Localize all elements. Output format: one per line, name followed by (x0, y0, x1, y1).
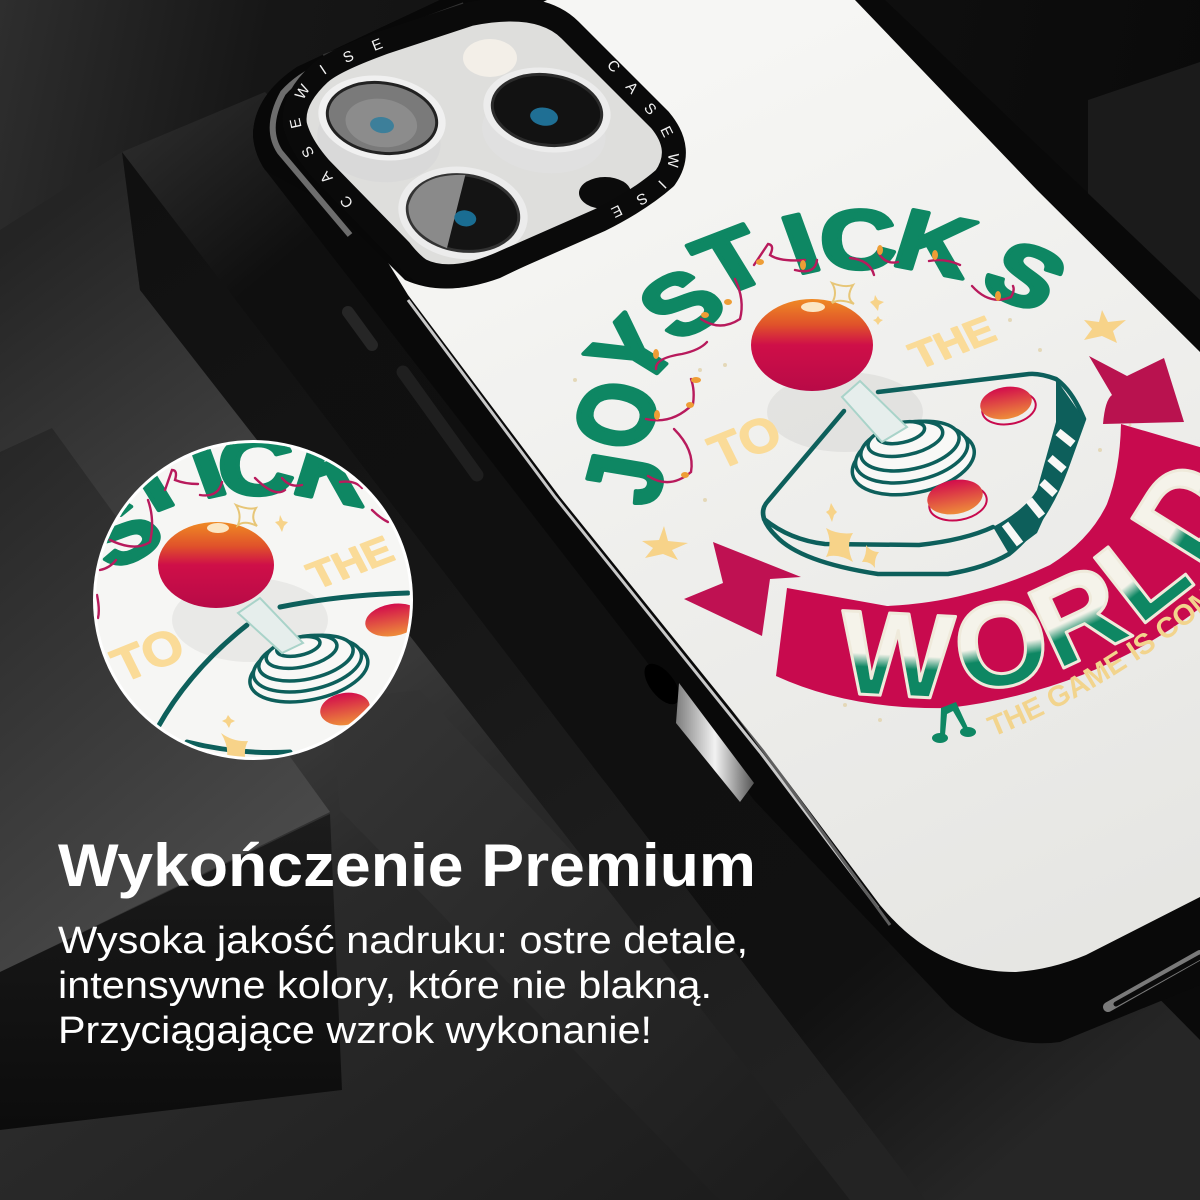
circle ball (158, 522, 274, 608)
lens left (310, 68, 451, 190)
case body (253, 0, 1200, 1043)
floor surface (0, 152, 1000, 1200)
brand mark right: CASEWISE (608, 60, 679, 218)
bottom port slot (1116, 957, 1200, 1004)
case side sheen inner (408, 300, 878, 908)
joystick rings (850, 420, 976, 496)
lit diagonal floor band (330, 690, 900, 1200)
circle word THE: THE (300, 528, 401, 597)
lens right (475, 60, 616, 181)
body copy: Przyciągające wzrok wykonanie! (58, 1010, 652, 1052)
circle shadow (172, 578, 328, 662)
title JOYSTICKS: Y (565, 301, 701, 402)
circle joystick (158, 505, 423, 762)
brand mark left: CASEWISE (290, 38, 383, 208)
word THE: THE (902, 308, 1003, 377)
lens bottom (392, 158, 534, 268)
circle title letters: S (56, 479, 184, 587)
circle paper (96, 443, 410, 757)
circle base outlines (158, 593, 408, 753)
island outer (253, 0, 683, 289)
circle title letters: C (216, 419, 296, 514)
body copy (58, 920, 748, 1052)
circle garland (97, 470, 388, 618)
joystick side stripes (1005, 432, 1073, 544)
ball highlight (801, 302, 825, 312)
stars and sparkles (642, 283, 1126, 568)
circle title letters (102, 443, 365, 566)
side button small (348, 312, 372, 345)
circle title letters: K (284, 420, 386, 525)
heading: Wykończenie Premium (58, 832, 756, 899)
silver side button (676, 683, 754, 802)
microphone sensor (579, 177, 631, 209)
word WORLD (841, 468, 1200, 700)
case side sheen outer (690, 650, 890, 925)
phone with case (253, 0, 1200, 1044)
garland bulbs (653, 245, 1001, 478)
clear bumper top strip (325, 8, 465, 60)
word WORLD: O (945, 572, 1058, 718)
circle title letters: T (95, 429, 205, 535)
side action button (403, 372, 477, 475)
title JOYSTICKS: I (771, 196, 831, 292)
magnifier circle detail (93, 440, 413, 760)
paper specks (573, 318, 1132, 722)
title JOYSTICKS (576, 208, 1064, 505)
circle background (93, 440, 413, 760)
circle sparkles (236, 505, 257, 526)
circle shaft (238, 598, 303, 653)
music note (932, 702, 976, 743)
circle highlight (207, 523, 229, 533)
bottom port (1108, 955, 1200, 1007)
printed artwork (573, 208, 1200, 743)
word WORLD: R (1011, 537, 1146, 695)
circle word TO: TO (103, 618, 193, 693)
ribbon tail right (1089, 356, 1184, 424)
title JOYSTICKS: K (884, 192, 986, 297)
black band with branding (295, 10, 674, 276)
circle button right (365, 604, 410, 636)
joystick shaft (842, 381, 907, 442)
island glass (295, 10, 674, 276)
button lower (927, 480, 988, 522)
title JOYSTICKS: T (676, 208, 786, 314)
joystick base (751, 299, 1084, 574)
circle star (221, 733, 248, 762)
joystick ball (751, 299, 873, 391)
white back panel (300, 0, 1200, 972)
title JOYSTICKS: J (562, 447, 689, 511)
joystick top face edge (764, 519, 993, 545)
clear bumper strip (273, 64, 350, 235)
left foreground block (0, 428, 342, 1130)
light garland (646, 244, 1014, 482)
word WORLD: W (837, 585, 958, 725)
right stone block (1088, 62, 1200, 380)
title JOYSTICKS: O (549, 370, 686, 460)
flash (463, 39, 517, 77)
joystick side band (993, 379, 1084, 554)
body copy: Wysoka jakość nadruku: ostre detale, (58, 920, 748, 962)
circle button lower (318, 689, 372, 729)
circle title letters: I (177, 420, 237, 516)
title JOYSTICKS: S (965, 222, 1085, 331)
joystick shadow (767, 372, 923, 452)
side button recess (638, 658, 686, 710)
ribbon band (776, 424, 1200, 708)
title JOYSTICKS: S (618, 250, 746, 358)
circle artwork (96, 443, 410, 757)
camera island (264, 2, 686, 288)
body copy: intensywne kolory, które nie blakną. (58, 965, 712, 1007)
title JOYSTICKS: C (818, 193, 898, 288)
word TO: TO (700, 405, 790, 480)
ribbon tail left (684, 542, 801, 636)
circle rings (248, 634, 370, 704)
button upper (980, 386, 1037, 426)
